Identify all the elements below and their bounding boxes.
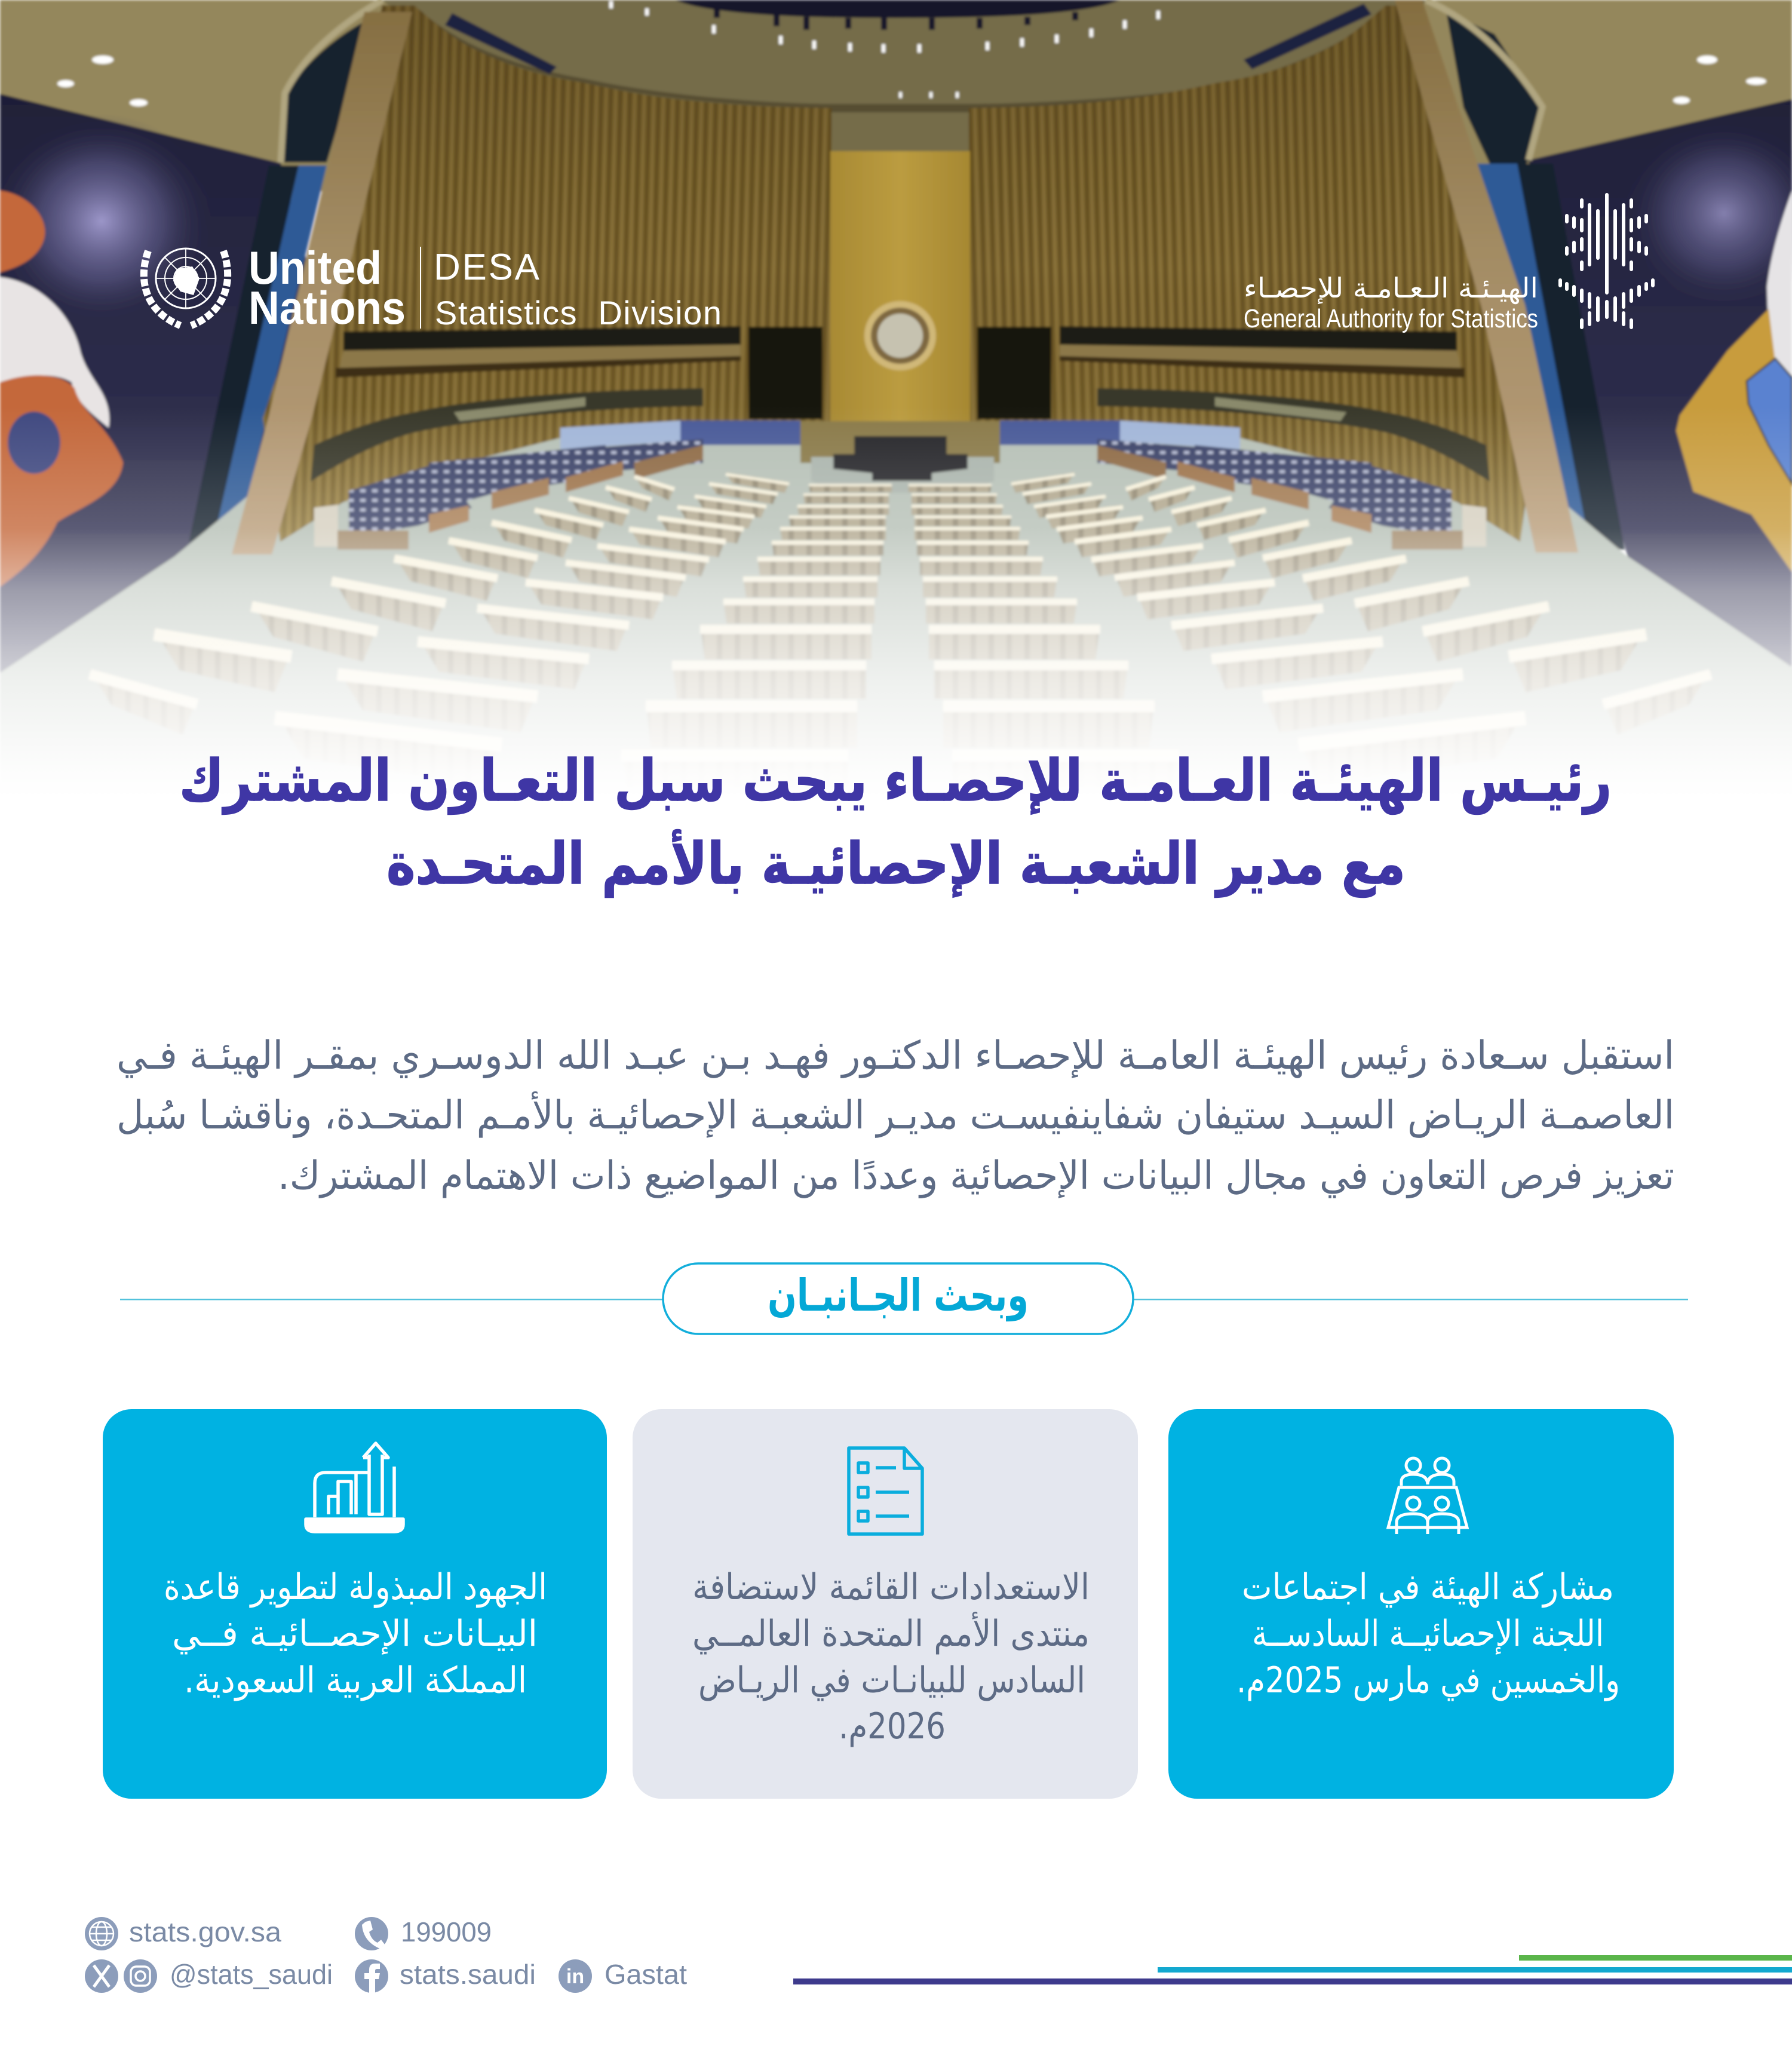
fade to white overlay xyxy=(0,406,1792,800)
panel: UN World Data Forum xyxy=(633,1409,1138,1799)
intro paragraph: استقبل سـعادة رئيس الهيئـة العامـة للإحصـاء الدكتـور فهـد بـن عبـد الله الدوسـري بمقـر الهيئـة فـي xyxy=(116,1033,1674,1078)
wood behind rostrum xyxy=(800,421,1000,463)
panel text: السادس للبيانـات في الريـاض xyxy=(698,1660,1085,1701)
panel text: منتدى الأمم المتحدة العالمــي xyxy=(692,1612,1090,1655)
title xyxy=(179,747,1612,898)
DESA Statistics Division text: Statistics Division xyxy=(435,294,722,332)
left tan pillar xyxy=(232,12,412,554)
intro paragraph: تعزيز فرص التعاون في مجال البيانات الإحصائية وعددًا من المواضيع ذات الاهتمام المشترك. xyxy=(278,1154,1674,1198)
hero photo: General Assembly hall xyxy=(0,0,1792,800)
icon: checklist document xyxy=(849,1448,922,1534)
left ceiling vent xyxy=(445,13,557,74)
section divider line xyxy=(120,1299,1688,1300)
chandelier canopy xyxy=(675,0,1120,18)
rostrum platform xyxy=(811,457,994,493)
icon: UN emblem xyxy=(144,249,228,326)
left dark strip xyxy=(189,165,299,542)
right seating rows xyxy=(909,473,1711,789)
panel text: 2026م. xyxy=(839,1705,946,1747)
GASTAT logo xyxy=(1244,195,1653,333)
right tan pillar xyxy=(1395,0,1578,553)
United Nations wordmark: United xyxy=(248,241,382,294)
chandelier fixtures xyxy=(717,9,1075,30)
left blue strip xyxy=(213,165,327,542)
UN emblem on podium wall xyxy=(864,301,936,370)
ceiling rims xyxy=(281,0,1542,162)
panel text: اللجنة الإحصائيــة السادســة xyxy=(1252,1613,1604,1655)
X and Instagram contact: @stats_saudi xyxy=(170,1959,333,1990)
left dark recess xyxy=(281,22,364,162)
phone contact: 199009 xyxy=(401,1916,492,1947)
icon: people around table xyxy=(1388,1458,1467,1534)
footer accent lines xyxy=(793,1955,1792,1984)
panel text: الاستعدادات القائمة لاستضافة xyxy=(692,1566,1090,1608)
lavender glow left xyxy=(0,114,215,329)
panel text: المملكة العربية السعودية. xyxy=(184,1660,527,1701)
left curved wood wall xyxy=(263,5,831,550)
website contact: stats.gov.sa xyxy=(129,1916,281,1947)
right blue strip xyxy=(1475,164,1592,538)
ceiling lights xyxy=(57,1,1766,106)
X and Instagram contact xyxy=(85,1959,333,1993)
Facebook contact: stats.saudi xyxy=(400,1959,536,1990)
central ceiling dome xyxy=(382,0,1428,161)
left seating rows xyxy=(90,473,892,789)
LinkedIn contact: Gastat xyxy=(605,1959,687,1990)
right ceiling vent xyxy=(1244,4,1371,69)
central gold panel xyxy=(830,151,970,432)
right dark recess xyxy=(1446,11,1542,197)
right speaker xyxy=(977,327,1051,419)
left mural shapes xyxy=(0,191,123,587)
hall floor xyxy=(0,412,1792,795)
icon: GASTAT symbol xyxy=(1560,195,1653,327)
panel text: والخمسين في مارس 2025م. xyxy=(1236,1660,1620,1701)
section heading pill xyxy=(663,1263,1133,1334)
panel: database development xyxy=(103,1409,607,1799)
icon: chart on laptop xyxy=(306,1443,403,1532)
logo divider xyxy=(420,247,421,329)
lavender glow right xyxy=(1622,118,1792,309)
right mural shapes xyxy=(1676,191,1792,572)
panel text xyxy=(1236,1566,1620,1701)
panel text: الجهود المبذولة لتطوير قاعدة xyxy=(164,1566,547,1608)
DESA Statistics Division text: DESA xyxy=(434,247,540,288)
intro paragraph: العاصمـة الريـاض السيـد ستيفان شفاينفيسـت مديـر الشعبـة الإحصائيـة بالأمـم المتحـدة، وناقشـا سُبل xyxy=(116,1091,1674,1138)
LinkedIn contact: in xyxy=(566,1965,584,1988)
UN Statistics Division logo xyxy=(144,241,722,334)
panel text: مشاركة الهيئة في اجتماعات xyxy=(1242,1566,1614,1608)
right dark wall xyxy=(1529,99,1792,673)
right curved wood wall xyxy=(969,5,1538,550)
Facebook contact xyxy=(355,1959,536,1993)
left dark wall xyxy=(0,94,317,673)
title: مع مدير الشعبـة الإحصائيـة بالأمم المتحـدة xyxy=(386,829,1406,898)
LinkedIn contact xyxy=(559,1959,687,1993)
United Nations wordmark xyxy=(248,241,406,334)
panel text: البيـانات الإحصــائيـة فــي xyxy=(172,1613,538,1655)
DESA Statistics Division text xyxy=(434,247,722,332)
section heading pill: وبحث الجـانبـان xyxy=(768,1270,1029,1322)
intro paragraph xyxy=(116,1033,1674,1198)
right dark strip xyxy=(1517,164,1625,550)
ceiling xyxy=(0,0,1792,191)
United Nations wordmark: Nations xyxy=(248,281,406,334)
website contact xyxy=(85,1916,281,1950)
GASTAT Arabic name: الهيـئـة الـعـامـة للإحصـاء xyxy=(1244,272,1538,304)
panel text xyxy=(692,1566,1090,1747)
panel text xyxy=(164,1566,547,1701)
GASTAT English name: General Authority for Statistics xyxy=(1244,304,1538,333)
footer contacts xyxy=(85,1916,687,1993)
dome shadow line xyxy=(430,24,1374,108)
rostrum desk xyxy=(833,436,968,481)
phone contact xyxy=(355,1916,492,1950)
panel: commission meetings xyxy=(1168,1409,1674,1799)
left speaker xyxy=(748,327,823,419)
